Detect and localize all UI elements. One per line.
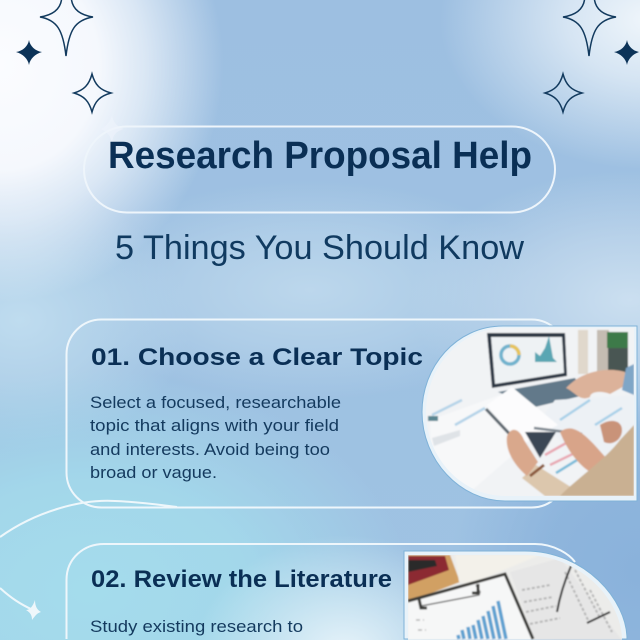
subtitle: 5 Things You Should Know <box>115 229 524 267</box>
icon: small filled star <box>614 40 639 65</box>
icon: large outline star <box>563 0 616 56</box>
papers on table <box>430 395 530 492</box>
hands and arms <box>522 464 570 496</box>
photo: clipboard with bar chart <box>404 551 627 640</box>
photo: business team reviewing charts <box>420 326 637 501</box>
icon: pale sparkle <box>26 600 41 620</box>
lower curve <box>0 588 33 610</box>
panel: 01 choose a clear topic <box>66 320 566 508</box>
tablet <box>484 408 510 435</box>
decorative stars, top left <box>16 0 111 112</box>
photo frame <box>404 551 627 639</box>
icon: small filled star <box>16 40 42 65</box>
body text: Study existing research to <box>90 617 303 636</box>
spreadsheet <box>510 558 622 640</box>
title pill <box>84 115 555 212</box>
clipboard <box>408 574 533 640</box>
connector curve with star <box>0 501 177 620</box>
icon: medium outline star <box>545 74 582 112</box>
bar chart on clipboard <box>458 601 506 639</box>
wooden desk and book <box>408 555 460 602</box>
pen marks <box>557 566 571 612</box>
body text: Select a focused, researchable <box>90 393 341 412</box>
upper curve <box>0 501 177 537</box>
icon: pale sparkle on pill <box>100 115 124 143</box>
body text: topic that aligns with your field <box>90 416 339 435</box>
shelf objects <box>578 330 588 374</box>
body text: and interests. Avoid being too <box>90 440 330 459</box>
photo frame <box>422 326 637 501</box>
body text <box>90 393 341 482</box>
icon: large outline star <box>40 0 93 56</box>
body text: broad or vague. <box>90 463 217 482</box>
card outline <box>66 320 566 508</box>
laptop <box>498 378 585 407</box>
white document <box>458 578 460 582</box>
heading: 02. Review the Literature <box>91 566 392 593</box>
decorative stars, top right <box>545 0 639 112</box>
card outline <box>66 544 575 639</box>
heading: 01. Choose a Clear Topic <box>91 344 423 371</box>
panel: 02 review the literature <box>66 544 575 639</box>
title: Research Proposal Help <box>108 135 532 177</box>
icon: medium outline star <box>74 74 111 112</box>
